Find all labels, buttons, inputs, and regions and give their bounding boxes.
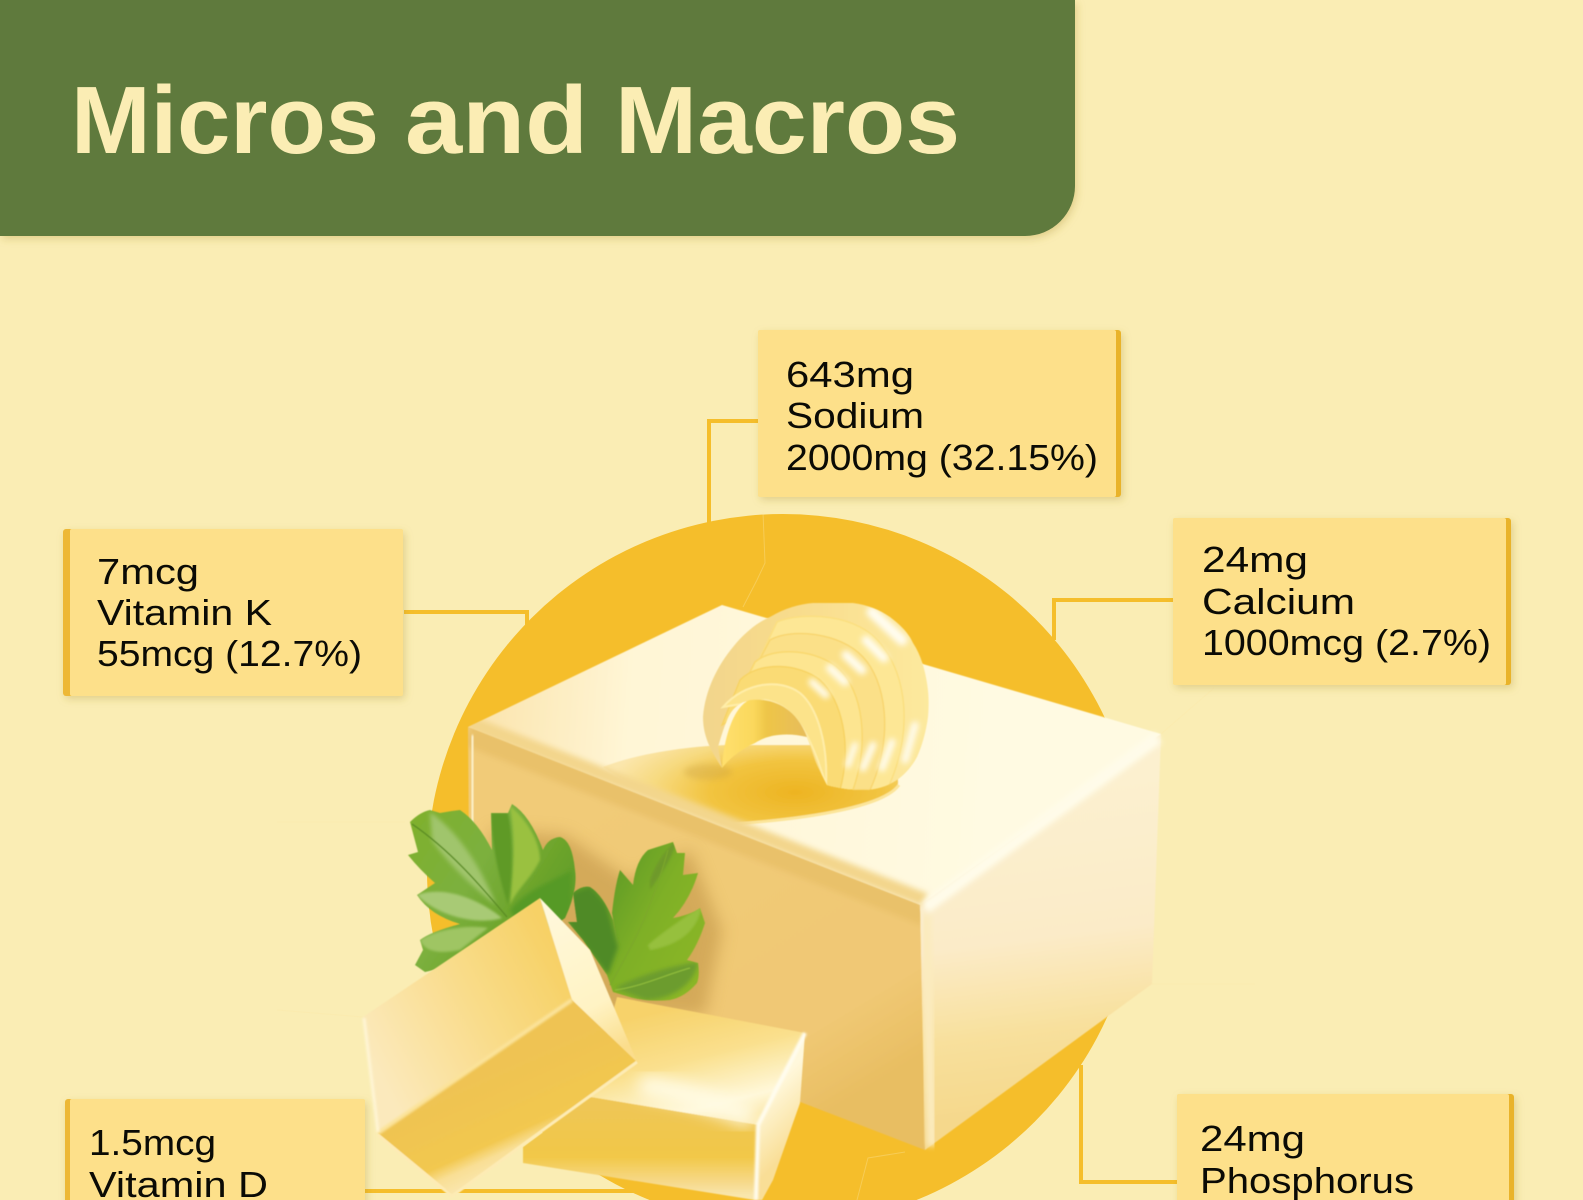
curl highlights <box>812 612 915 768</box>
upper dark frond <box>650 844 674 888</box>
connector: sodium <box>709 421 758 523</box>
cube right face <box>755 1033 805 1200</box>
leaf blade <box>568 842 705 1001</box>
banner shape <box>0 0 1075 236</box>
dark lobe <box>568 887 618 975</box>
text: 24mg <box>1202 539 1308 580</box>
text: 643mg <box>786 354 914 395</box>
text: Calcium <box>1202 581 1355 622</box>
right top highlight edge <box>925 738 1158 908</box>
callout: sodium <box>758 330 1121 497</box>
connector: vitamin D <box>365 1189 640 1193</box>
mid-lobe light patch <box>417 892 502 921</box>
upper leaflet dark side <box>491 813 512 905</box>
title: Macros <box>615 67 960 174</box>
light frond patch <box>648 905 702 950</box>
callout: vitamin K <box>63 529 403 696</box>
pool shadow under curl <box>685 764 730 780</box>
left corner highlight <box>472 735 473 960</box>
box with right bar <box>1177 1094 1514 1200</box>
title: and <box>405 67 588 174</box>
box fill <box>70 529 403 696</box>
left front face <box>468 727 925 1150</box>
rear butter cube <box>523 997 805 1200</box>
text: 24mg <box>1200 1118 1305 1159</box>
box with right bar <box>758 330 1121 497</box>
midrib <box>610 850 668 985</box>
text: 1.5mcg <box>89 1122 216 1163</box>
midrib <box>412 824 507 917</box>
soft bevel above front edge <box>468 722 925 900</box>
connector: calcium <box>1054 600 1173 640</box>
cube bottom rim <box>378 1062 637 1196</box>
cube corner highlight <box>756 1033 805 1200</box>
connector: vitamin K <box>404 612 527 626</box>
butter curl <box>703 603 929 790</box>
connector: phosphorus <box>1081 1065 1177 1182</box>
callout: calcium <box>1173 518 1511 685</box>
text: 55mcg (12.7%) <box>97 633 362 674</box>
leaf blade <box>408 804 576 972</box>
cube right face <box>540 898 637 1062</box>
upper leaflet light patch <box>510 806 540 905</box>
text <box>1200 1118 1414 1200</box>
faint cut-out traces <box>277 512 1255 1200</box>
melted pool <box>603 745 898 823</box>
cube lower face <box>378 1000 637 1195</box>
bottom dark frond <box>615 962 698 1000</box>
right parsley leaf <box>568 842 705 1001</box>
title: Micros <box>71 67 379 174</box>
box with right bar <box>1173 518 1511 685</box>
cube top glow <box>640 1085 752 1118</box>
cube front face <box>523 1097 758 1200</box>
upper light patch <box>430 812 496 905</box>
box with left bar <box>63 529 403 696</box>
cube left edge highlight <box>364 1018 378 1132</box>
curl ridge bands <box>722 616 904 790</box>
text: Vitamin K <box>97 592 272 633</box>
front butter cube <box>363 898 637 1196</box>
pool rim <box>733 785 899 824</box>
text: 1000mcg (2.7%) <box>1202 622 1491 663</box>
curl body <box>703 603 929 790</box>
box fill <box>1177 1094 1509 1200</box>
text: 7mcg <box>97 551 199 592</box>
text: Phosphorus <box>1200 1160 1414 1200</box>
title <box>71 67 960 174</box>
text <box>1202 539 1491 663</box>
cube upper-left face <box>363 898 572 1133</box>
text <box>786 354 1098 478</box>
text: 2000mg (32.15%) <box>786 437 1098 478</box>
bottom vein <box>615 968 690 990</box>
top face <box>468 605 1161 911</box>
text <box>89 1122 268 1200</box>
curl hollow <box>722 700 807 768</box>
vertical corner highlight <box>926 915 932 1146</box>
gold circle behind butter <box>427 514 1139 1200</box>
header banner <box>0 0 1075 236</box>
text: Sodium <box>786 395 924 436</box>
front bevel <box>468 735 925 915</box>
callout: vitamin D <box>65 1099 365 1200</box>
leaf shading <box>568 842 702 1000</box>
main butter block <box>468 605 1161 1150</box>
box fill <box>70 1099 365 1200</box>
callout: phosphorus <box>1177 1094 1514 1200</box>
left parsley leaf <box>408 804 576 972</box>
cube top face <box>590 997 805 1125</box>
text <box>97 551 362 674</box>
cube edge highlight <box>378 1000 572 1133</box>
leaf shading <box>417 806 572 952</box>
parsley shadow on butter <box>490 830 722 1015</box>
box fill <box>1173 518 1506 685</box>
base dark patch <box>510 872 571 920</box>
box with left bar <box>65 1099 365 1200</box>
lower-lobe light patch <box>420 927 488 952</box>
box fill <box>758 330 1116 497</box>
right front face <box>920 734 1161 1150</box>
